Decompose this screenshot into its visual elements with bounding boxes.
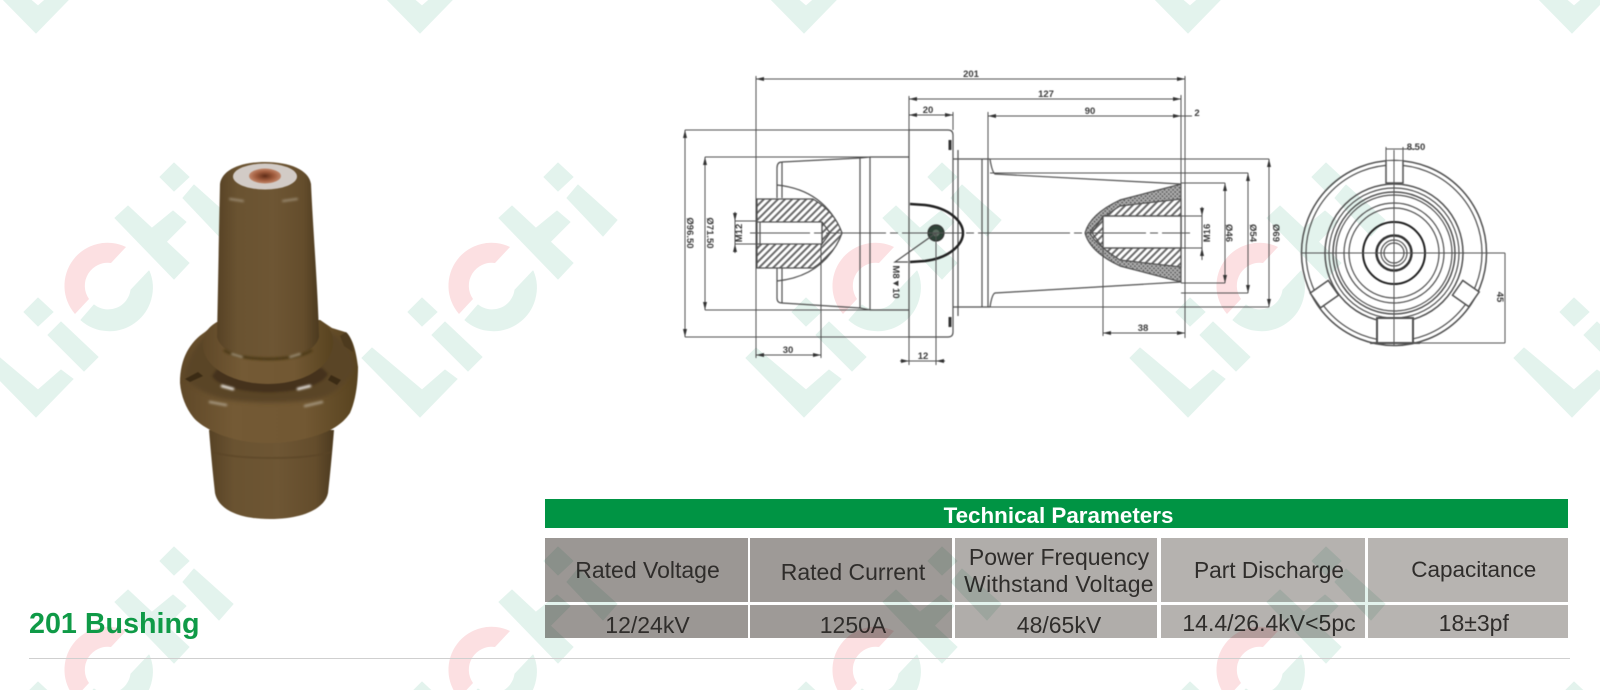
cell: Capacitance — [1368, 538, 1568, 602]
bottom slot — [1370, 318, 1420, 343]
right slot — [1452, 280, 1479, 307]
cell: 12/24kV: 12/24kV — [605, 612, 690, 638]
notch — [340, 332, 353, 352]
cell: Rated Voltage — [545, 538, 748, 602]
divider rule — [29, 658, 1570, 659]
dimension labels: 38 — [1138, 323, 1148, 334]
copper hole — [249, 168, 281, 184]
cell: Capacitance: Capacitance — [1411, 557, 1536, 582]
right hatched threaded insert — [1085, 184, 1181, 282]
neck base shadow — [224, 350, 312, 359]
cell: 12/24kV — [545, 605, 748, 638]
centre line — [750, 232, 1190, 234]
cell: Part Discharge: Part Discharge — [1194, 557, 1344, 583]
cell: 14.4/26.4kV<5pc: 14.4/26.4kV<5pc — [1182, 610, 1356, 636]
collar shadow — [212, 368, 328, 392]
centre lines and dimension — [1302, 147, 1505, 345]
dimension labels: Ø46 — [1223, 224, 1234, 242]
cell: Part Discharge — [1161, 538, 1365, 602]
left hatched threaded insert — [757, 185, 842, 281]
dimension labels: 201 — [963, 69, 980, 80]
highlights — [210, 199, 322, 406]
cell: 48/65kV — [955, 605, 1157, 638]
dimension labels: M16 — [1202, 224, 1213, 242]
neck — [217, 162, 319, 360]
lower barrel — [209, 430, 334, 519]
cell: Rated Voltage: Rated Voltage — [575, 557, 720, 583]
dimension labels: M12 — [734, 224, 745, 242]
arrowheads — [683, 77, 1271, 363]
table: technical parameters — [545, 499, 1568, 638]
flange top recess — [184, 330, 355, 402]
dimension labels: M8▼10 — [890, 265, 901, 299]
cell: 48/65kV: 48/65kV — [1017, 612, 1101, 638]
dimension labels: Ø54 — [1247, 224, 1258, 243]
title: 201 Bushing — [29, 608, 200, 640]
cell: Power Frequency Withstand Voltage: Power Frequency — [969, 544, 1149, 570]
table header bar — [545, 499, 1568, 528]
cell: Rated Current — [750, 538, 952, 602]
cell: 18±3pf: 18±3pf — [1439, 610, 1509, 636]
top slot — [1386, 161, 1403, 183]
cell: Power Frequency Withstand Voltage — [955, 538, 1157, 602]
dimension labels: 12 — [918, 351, 928, 362]
dimension labels: 20 — [923, 105, 933, 116]
end view — [1302, 147, 1505, 346]
D-shaped cutaway and M8 hole — [895, 204, 963, 262]
cell: 18±3pf — [1368, 605, 1568, 638]
flange slots — [185, 372, 341, 385]
cell: 1250A — [750, 605, 952, 638]
dimension labels: 127 — [1038, 89, 1054, 100]
left slot — [1310, 280, 1339, 308]
dimension labels: Ø69 — [1270, 224, 1281, 242]
collar — [203, 320, 333, 384]
cell: 1250A: 1250A — [820, 612, 886, 638]
cell: 14.4/26.4kV<5pc — [1161, 605, 1365, 638]
dimension labels: Ø96.50 — [684, 217, 695, 249]
dimension labels: 2 — [1194, 108, 1200, 119]
dimension labels — [684, 69, 1505, 362]
dimension labels: Ø71.50 — [704, 217, 715, 249]
dimension labels: 8.50 — [1407, 142, 1425, 153]
flange — [180, 320, 358, 443]
table header bar: Technical Parameters — [944, 503, 1173, 528]
dimension lines — [685, 76, 1269, 365]
dimension labels: 90 — [1085, 106, 1095, 117]
dimension labels: 30 — [783, 345, 793, 356]
top ring — [233, 164, 297, 190]
cell: Power Frequency Withstand Voltage: Withstand Voltage — [964, 571, 1154, 597]
dimension labels: 45 — [1494, 292, 1505, 303]
barrel groove — [212, 452, 331, 458]
cell: Rated Current: Rated Current — [781, 559, 925, 585]
front view: insulator body — [750, 130, 1190, 337]
